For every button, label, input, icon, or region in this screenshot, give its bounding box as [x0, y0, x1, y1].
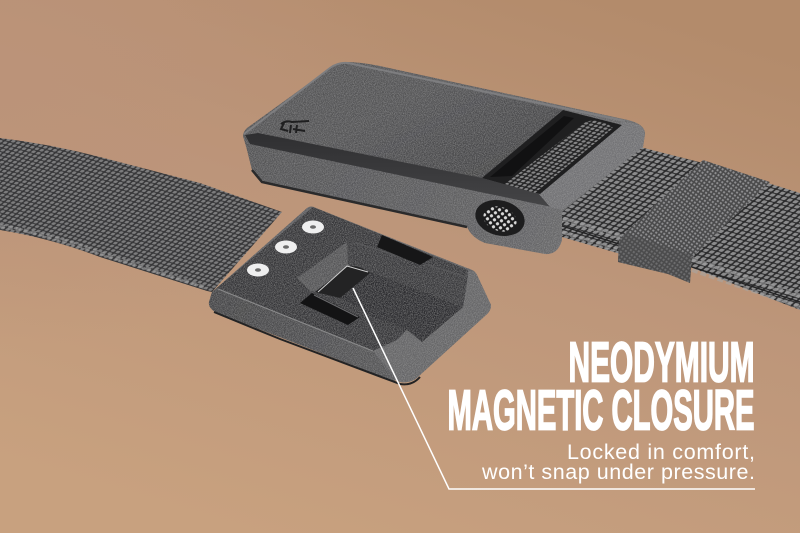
subheading: won’t snap under pressure. — [481, 460, 755, 484]
pocket floor — [340, 264, 463, 342]
edge highlight — [218, 289, 373, 351]
webbing slot — [482, 110, 622, 194]
top buckle — [243, 62, 645, 254]
subheading: Locked in comfort, — [567, 440, 755, 464]
lower slot — [300, 293, 360, 325]
recessed pocket slope — [297, 242, 358, 292]
right chamfer — [373, 271, 491, 382]
callout leader line — [353, 288, 755, 489]
release button — [472, 195, 528, 241]
rivets — [247, 220, 324, 276]
buckle right rim — [538, 122, 645, 210]
buckle body — [243, 62, 645, 254]
left buckle — [209, 206, 491, 384]
buckle light rim — [244, 63, 625, 134]
subheading — [481, 440, 755, 484]
right belt strap — [555, 146, 800, 310]
webbing through slot — [505, 120, 613, 193]
magnetic logo mark — [281, 121, 309, 133]
magnet plate — [315, 266, 370, 298]
raised ridge — [347, 241, 468, 307]
buckle base — [209, 206, 491, 382]
bottom shadow edge — [214, 312, 420, 384]
buckle top face — [248, 64, 563, 178]
buckle dark chamfer — [245, 133, 552, 207]
upper slot — [377, 235, 433, 265]
buckle top face — [212, 207, 468, 352]
belt keeper loop — [618, 160, 770, 283]
buckle underside shadow — [252, 170, 467, 227]
left belt strap — [0, 138, 282, 292]
front side face — [209, 288, 396, 382]
heading — [448, 330, 754, 442]
